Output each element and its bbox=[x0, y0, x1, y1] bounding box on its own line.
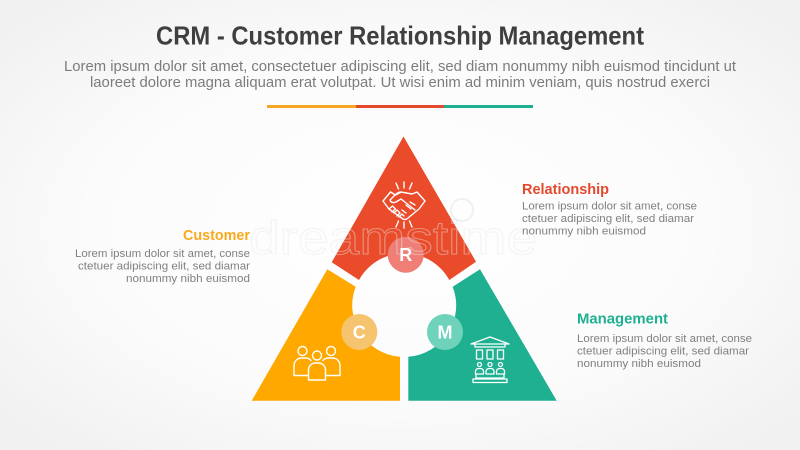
watermark: dreamstime bbox=[249, 211, 537, 264]
text block: management: Lorem ipsum dolor sit amet, conse bbox=[577, 333, 752, 345]
subtitle text: laoreet dolore magna aliquam erat volutpat. Ut wisi enim ad minim veniam, quis nostrud exerci bbox=[90, 75, 710, 91]
subtitle text bbox=[64, 59, 736, 91]
badge: C: C bbox=[353, 322, 366, 342]
text block: customer: Customer bbox=[183, 227, 250, 244]
subtitle text: Lorem ipsum dolor sit amet, consectetuer adipiscing elit, sed diam nonummy nibh euismod tincidunt ut bbox=[64, 59, 736, 75]
watermark bbox=[249, 199, 537, 264]
text block: relationship: Lorem ipsum dolor sit amet, conse bbox=[522, 200, 697, 212]
text block: management bbox=[577, 310, 752, 370]
badge: M: M bbox=[438, 322, 452, 342]
badge: R: R bbox=[399, 245, 412, 265]
tricolor rule bbox=[267, 105, 533, 108]
text block: relationship: ctetuer adipiscing elit, sed diamar bbox=[522, 213, 694, 225]
segment: relationship bbox=[332, 136, 476, 280]
triangle diagram bbox=[252, 136, 557, 401]
segment: customer bbox=[252, 269, 400, 401]
watermark: dreamstime bbox=[249, 211, 537, 264]
text block: management: nonummy nibh euismod bbox=[577, 358, 701, 370]
title: CRM - Customer Relationship Management bbox=[156, 20, 644, 50]
icon: handshake bbox=[383, 182, 425, 228]
text block: relationship bbox=[522, 181, 697, 238]
text block: customer: Lorem ipsum dolor sit amet, conse bbox=[75, 248, 250, 260]
text block: customer: ctetuer adipiscing elit, sed diamar bbox=[78, 260, 250, 272]
text block: customer bbox=[75, 227, 250, 285]
badge: R bbox=[388, 237, 424, 273]
text block: relationship: nonummy nibh euismod bbox=[522, 226, 646, 238]
icon: people bbox=[294, 346, 340, 380]
text block: management: Management bbox=[577, 310, 668, 328]
text block: relationship: Relationship bbox=[522, 181, 609, 198]
text block: management: ctetuer adipiscing elit, sed diamar bbox=[577, 346, 749, 358]
icon: institution bbox=[471, 337, 509, 382]
badge: C bbox=[341, 314, 377, 350]
segment: management bbox=[408, 269, 557, 401]
badge: M bbox=[427, 314, 463, 350]
text block: customer: nonummy nibh euismod bbox=[126, 273, 250, 285]
